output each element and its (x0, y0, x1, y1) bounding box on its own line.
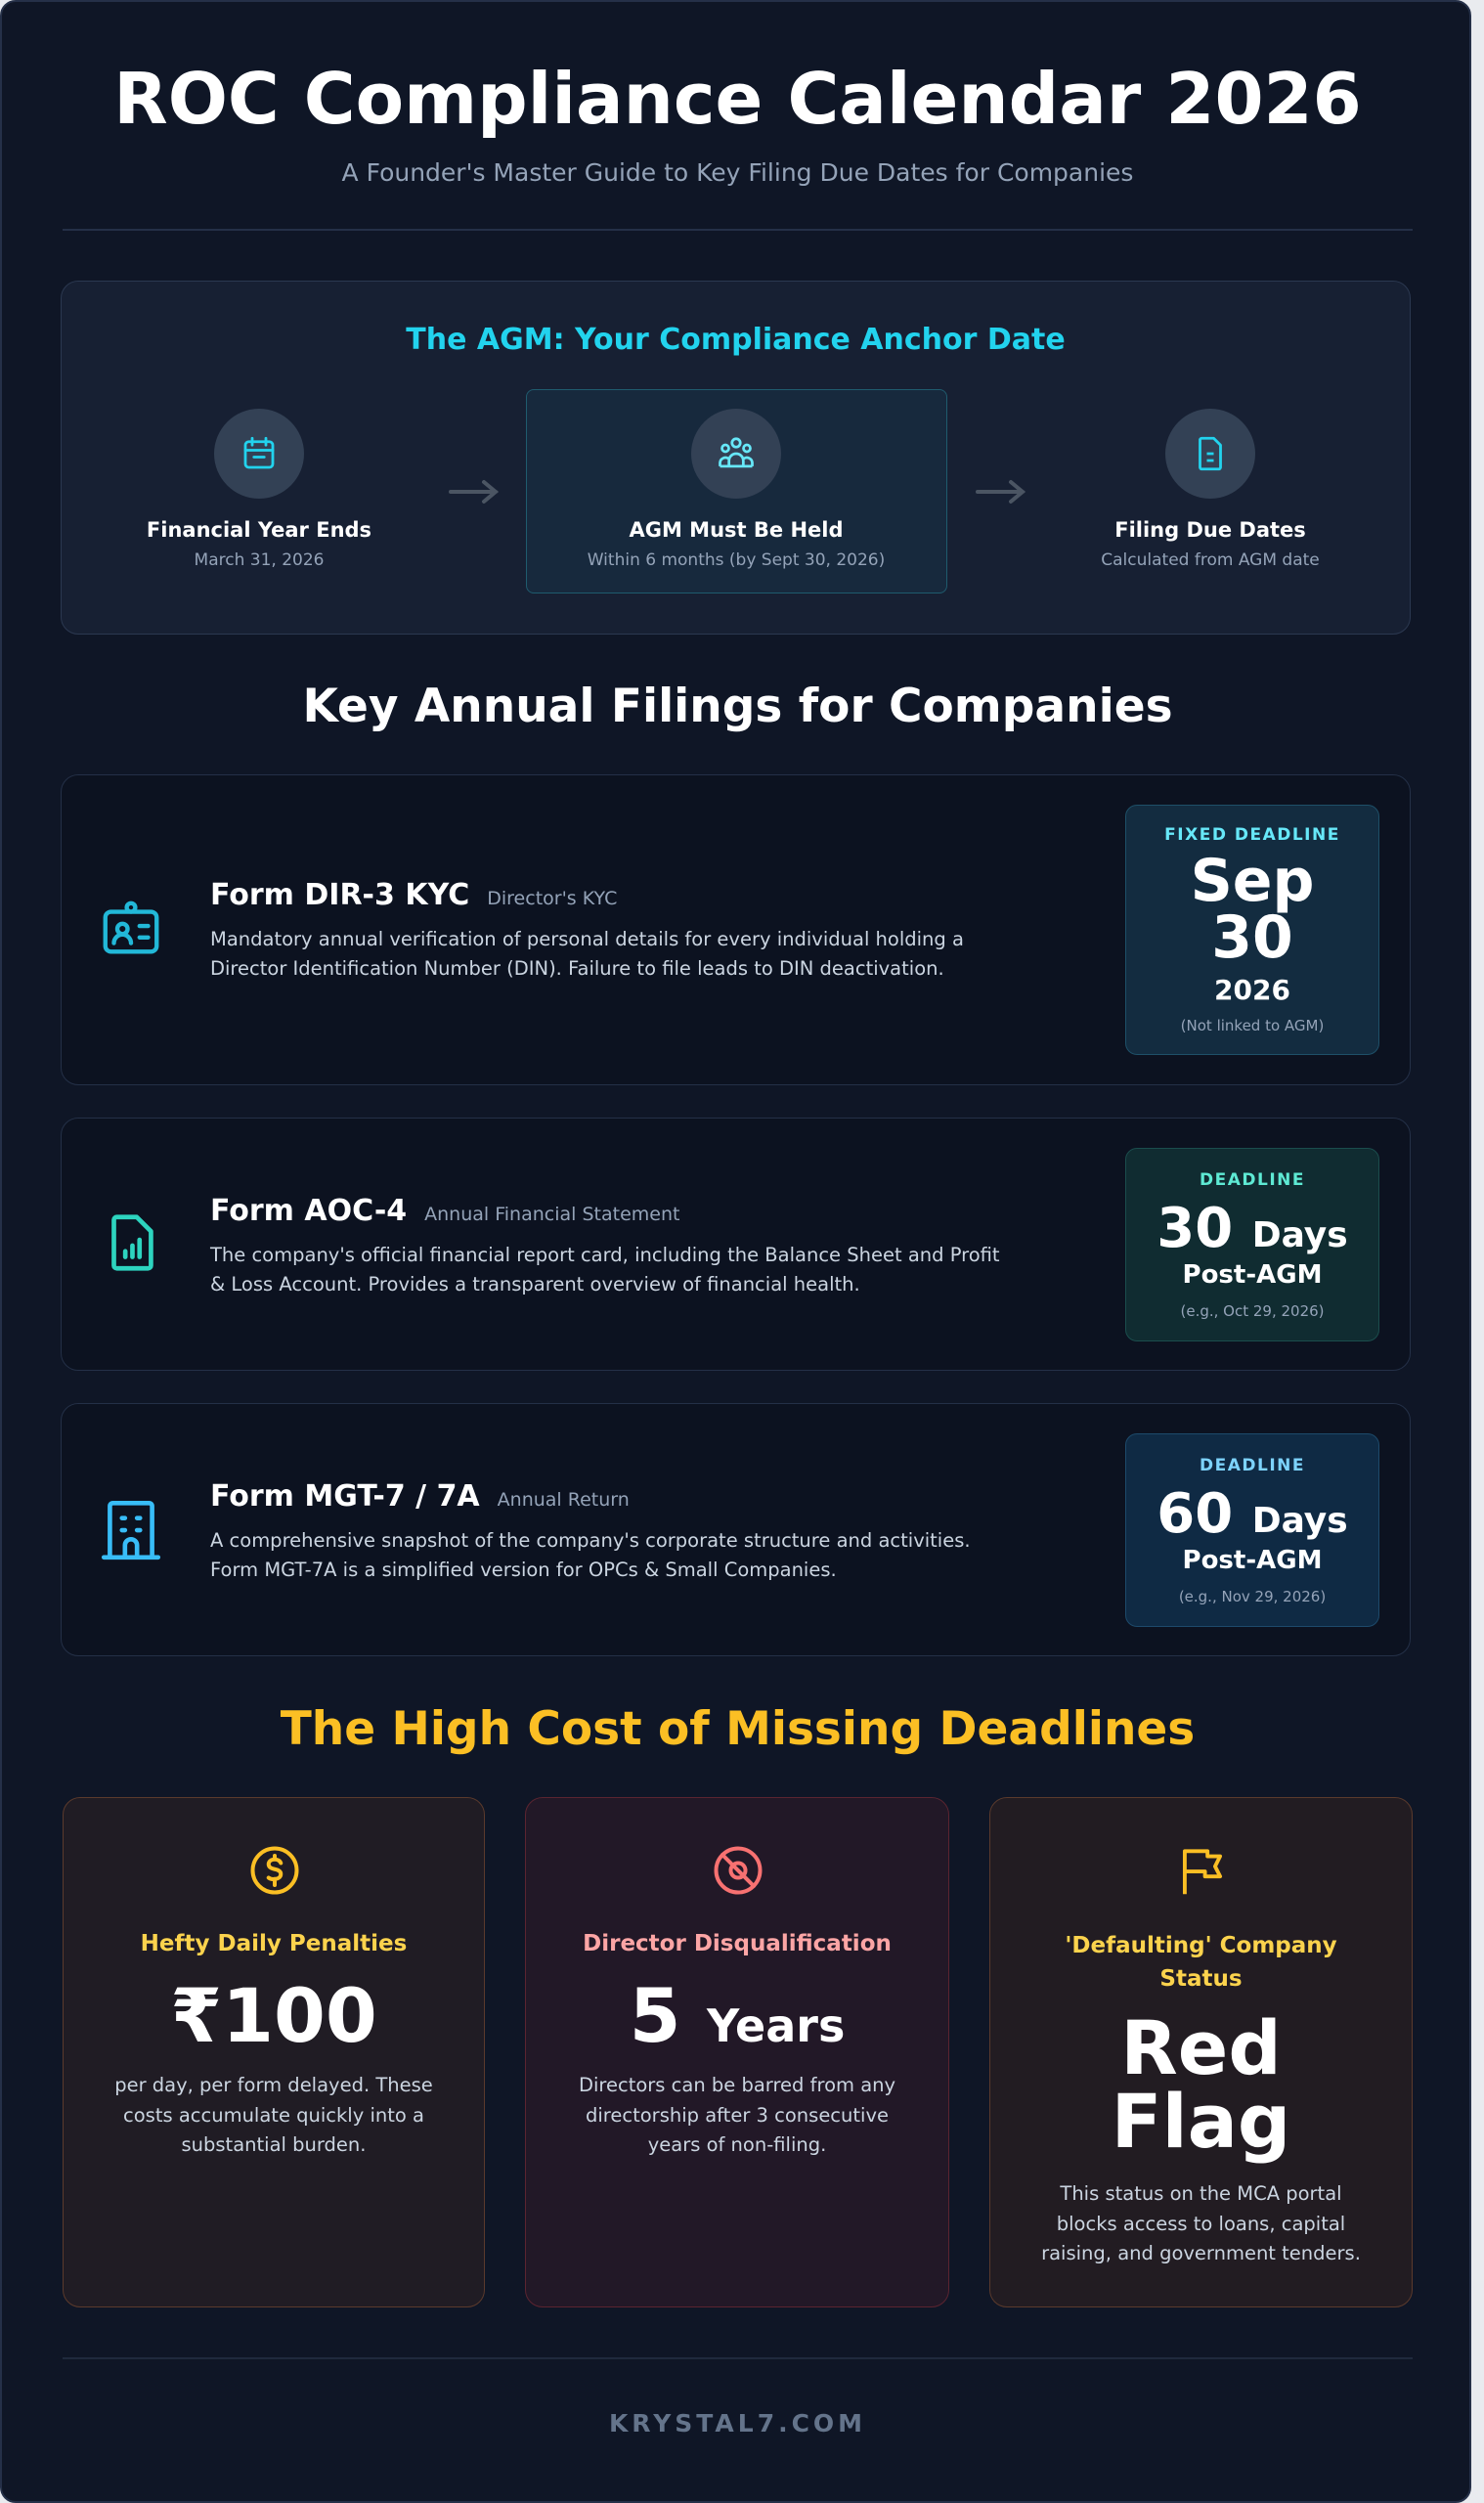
card: AOC-4 (61, 1118, 1411, 1371)
description: Mandatory annual verification of personal details for every individual holding a Director Identification Number (DIN). Failure to file leads to DIN deactivation. (210, 928, 964, 980)
cost card: director disqualification: Director Disqualification (583, 1931, 892, 1956)
deadline box (1125, 1148, 1379, 1341)
icon: building (102, 1501, 160, 1560)
heading: key annual filings: Key Annual Filings for Companies (302, 680, 1173, 733)
cost card: defaulting status: Red (1120, 2004, 1282, 2091)
cost card: daily penalties: per day, per form delayed. These costs accumulate quickly into a substantial burden. (114, 2074, 433, 2156)
deadline box: 60 Days (1157, 1482, 1348, 1546)
step: filing due dates: Calculated from AGM date (1101, 550, 1320, 570)
icon: banned (714, 1846, 763, 1895)
icon: people (691, 409, 781, 499)
cost card: daily penalties (63, 1797, 485, 2307)
deadline box: DEADLINE (1200, 1170, 1305, 1190)
title: ROC Compliance Calendar 2026 (113, 58, 1362, 140)
step: AGM must be held: AGM Must Be Held (629, 518, 843, 542)
arrow 2 (976, 480, 1026, 504)
cost card: director disqualification: Directors can be barred from any directorship after 3 consecutive years of non-filing. (579, 2074, 895, 2156)
card: MGT-7 (61, 1403, 1411, 1656)
highlighted middle step box (526, 389, 947, 593)
step: AGM must be held: Within 6 months (by Sept 30, 2026) (588, 550, 885, 570)
cost card: director disqualification (525, 1797, 949, 2307)
AGM heading: The AGM: Your Compliance Anchor Date (406, 323, 1066, 357)
step: filing due dates (1101, 409, 1320, 570)
card: DIR-3 KYC (61, 774, 1411, 1085)
icon: calendar (214, 409, 304, 499)
subtitle: A Founder's Master Guide to Key Filing Due Dates for Companies (342, 158, 1133, 187)
deadline box: FIXED DEADLINE (1164, 825, 1340, 845)
cost card: defaulting status: 'Defaulting' Company Status (1065, 1933, 1337, 1992)
step: financial year ends (147, 409, 371, 570)
deadline box (1125, 805, 1379, 1055)
title: Form MGT-7 / 7A Annual Return (210, 1479, 630, 1514)
step: AGM must be held (588, 409, 885, 570)
cost card: daily penalties: Hefty Daily Penalties (141, 1931, 407, 1956)
deadline box: 30 Days (1157, 1197, 1348, 1260)
deadline box: Post-AGM (1183, 1546, 1322, 1575)
deadline box: Sep (1191, 847, 1314, 915)
deadline box: 2026 (1214, 974, 1290, 1006)
panel: AGM anchor (61, 281, 1411, 635)
footer: KRYSTAL7.COM (609, 2409, 866, 2437)
deadline box: (Not linked to AGM) (1181, 1017, 1324, 1034)
heading: high cost: The High Cost of Missing Deadlines (281, 1702, 1195, 1756)
deadline box: DEADLINE (1200, 1456, 1305, 1475)
deadline box: Post-AGM (1183, 1260, 1322, 1290)
icon: flag (1183, 1849, 1222, 1895)
deadline box (1125, 1433, 1379, 1627)
title: Form DIR-3 KYC Director's KYC (210, 878, 617, 912)
icon: id badge (104, 901, 158, 954)
deadline box: (e.g., Nov 29, 2026) (1179, 1588, 1326, 1605)
description: The company's official financial report card, including the Balance Sheet and Profit & Loss Account. Provides a transparent overview of financial health. (210, 1244, 1000, 1295)
arrow 1 (449, 480, 499, 504)
deadline box: (e.g., Oct 29, 2026) (1180, 1302, 1325, 1320)
cost card: defaulting status (989, 1797, 1413, 2307)
cost card: daily penalties: ₹100 (170, 1972, 377, 2059)
icon: chart file (111, 1214, 153, 1271)
icon: coin (250, 1846, 299, 1895)
cost card: defaulting status: Flag (1112, 2078, 1290, 2165)
step: financial year ends: Financial Year Ends (147, 518, 371, 542)
icon: document (1165, 409, 1255, 499)
description: A comprehensive snapshot of the company's corporate structure and activities. Form MGT-7A is a simplified version for OPCs & Small Companies. (210, 1529, 971, 1581)
title: Form AOC-4 Annual Financial Statement (210, 1194, 679, 1228)
deadline box: 30 (1211, 903, 1293, 972)
step: financial year ends: March 31, 2026 (195, 550, 324, 570)
step: filing due dates: Filing Due Dates (1114, 518, 1306, 542)
cost card: defaulting status: This status on the MCA portal blocks access to loans, capital raising, and government tenders. (1041, 2182, 1361, 2264)
cost card: director disqualification: 5 Years (630, 1972, 845, 2059)
